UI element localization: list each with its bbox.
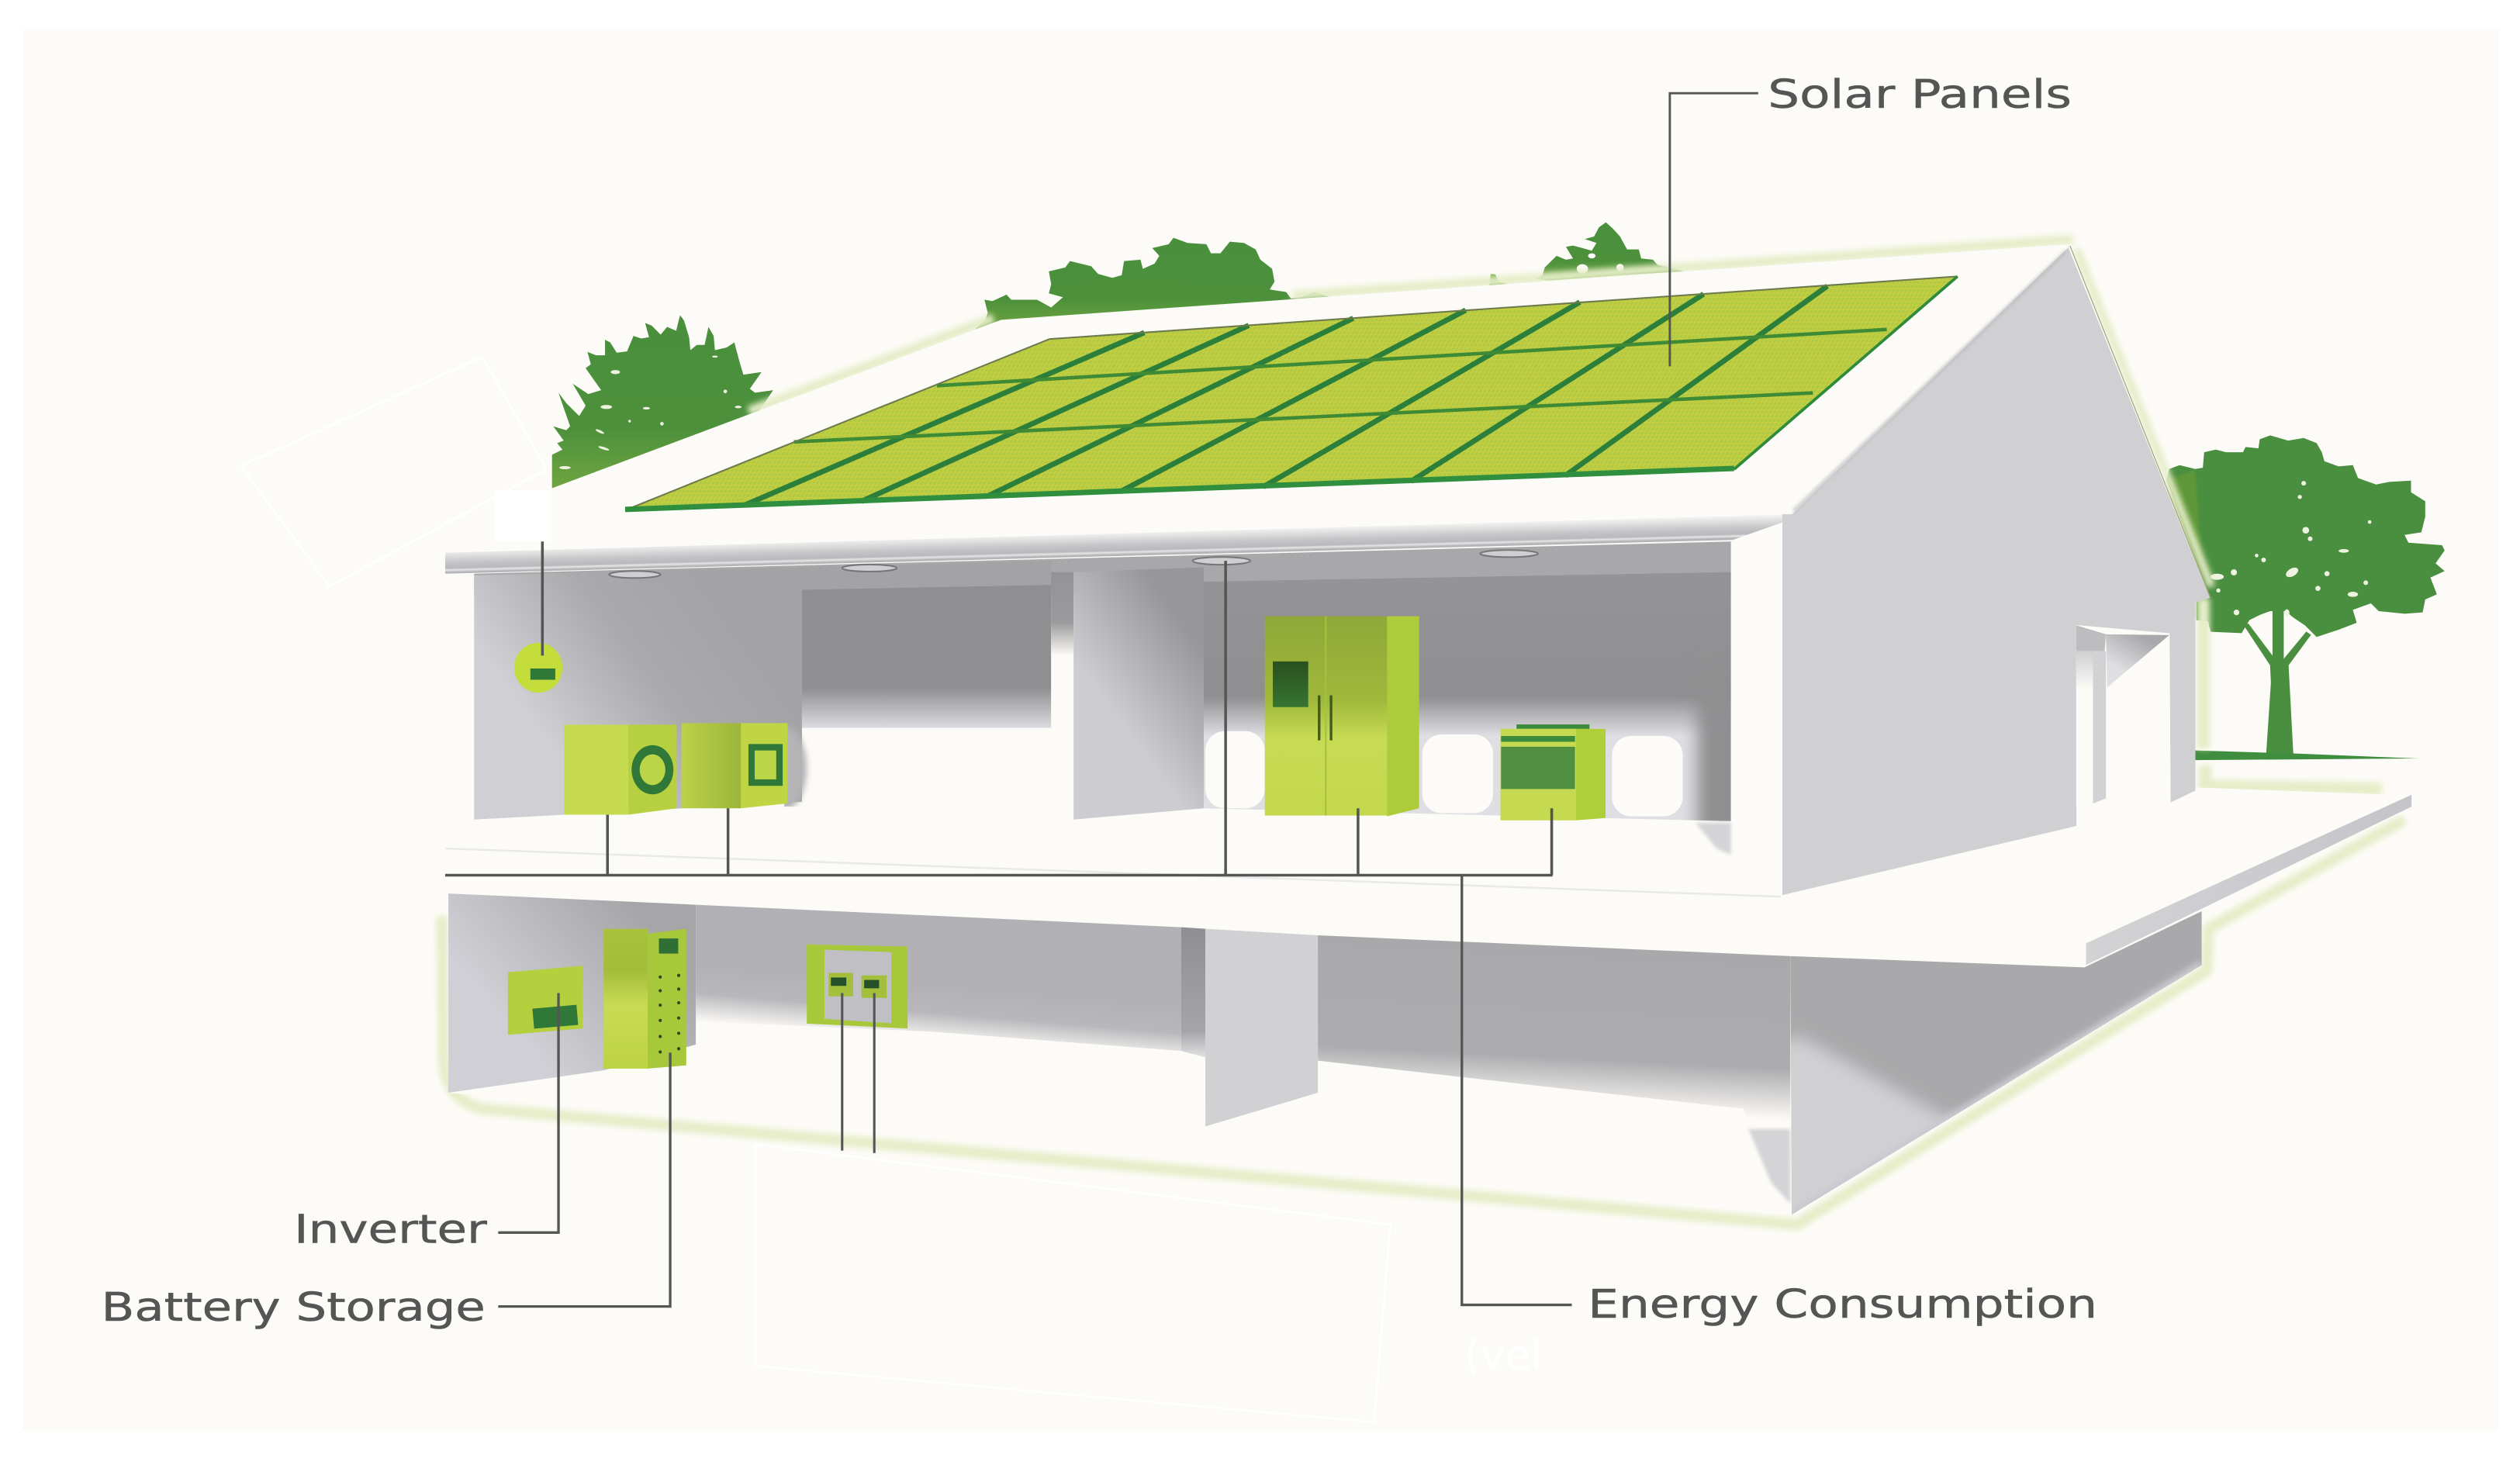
meter wires <box>842 993 874 1153</box>
upper floor interior <box>445 541 1781 897</box>
label: solar panels: Solar Panels <box>1768 71 2072 117</box>
label: inverter: Inverter <box>294 1207 487 1252</box>
gable shaded edge <box>1793 250 2067 511</box>
infographic: solar home cutaway <box>105 78 2445 1329</box>
bush speckles <box>1577 254 1623 274</box>
left room wall <box>474 561 1051 820</box>
leader: battery storage <box>498 1052 670 1307</box>
centre column <box>1073 567 1204 820</box>
white junction box <box>495 490 550 541</box>
inverter unit <box>508 966 582 1035</box>
basement column <box>1205 929 1318 1127</box>
floor edge highlight <box>445 848 1781 897</box>
leader: inverter <box>498 993 558 1232</box>
refrigerator <box>1265 617 1419 817</box>
grey strip beside column <box>1051 572 1073 655</box>
corner floor shadow <box>1696 823 1731 855</box>
oven <box>1500 724 1606 821</box>
oak speckles <box>2211 481 2371 617</box>
leader: solar panels <box>1670 93 1758 366</box>
deck edge <box>2086 795 2411 965</box>
back room two <box>1204 572 1731 821</box>
leader: energy consumption <box>1462 876 1571 1305</box>
back room one <box>802 585 1051 728</box>
doorway opening <box>2076 625 2170 807</box>
label: battery storage: Battery Storage <box>102 1284 486 1330</box>
alcove highlights <box>1205 731 1682 817</box>
pine speckles <box>559 355 741 469</box>
basement back wall one <box>696 905 1181 1051</box>
back room one white floor area <box>802 728 1051 803</box>
thermostat <box>514 643 562 693</box>
ceiling lights <box>609 550 1538 578</box>
solar panels <box>625 276 1958 510</box>
panel surface <box>625 276 1958 510</box>
right shadow strip <box>1688 700 1731 821</box>
right side wall of house <box>1782 247 2210 895</box>
tree: left pine behind roof <box>552 315 773 489</box>
basement right wall <box>1790 911 2202 1214</box>
lit bottom edge <box>1944 960 2201 1120</box>
far right bush <box>1536 223 1683 281</box>
doorway left recess <box>2076 625 2106 651</box>
basement corner wedge <box>1748 1129 1790 1204</box>
basement back wall two <box>1318 935 1790 1128</box>
dryer <box>682 723 787 808</box>
basement column shadow strip <box>1181 928 1205 1057</box>
oak canopy <box>2166 435 2445 637</box>
tree: right oak behind house <box>2166 435 2445 760</box>
house silhouette <box>448 244 2411 1214</box>
basement <box>448 893 2234 1238</box>
shadow beside dryer <box>784 727 810 807</box>
light wedge <box>1791 1033 1948 1213</box>
oak trunk and branches <box>2244 607 2311 755</box>
doorway shaded header <box>2106 634 2169 687</box>
washer <box>564 725 676 815</box>
basement left wall <box>448 893 696 1093</box>
green glow around house <box>442 240 2404 1225</box>
small sprout <box>1489 274 1507 285</box>
doorway pillar <box>2093 651 2106 803</box>
faint watermark text: (vel <box>1464 1330 1543 1379</box>
back doorway <box>2076 625 2170 807</box>
battery storage unit <box>603 929 686 1069</box>
appliance wires <box>542 541 1552 875</box>
tree: bushes behind roof <box>973 223 1683 331</box>
ground strip <box>2195 751 2418 760</box>
panel frame and dividers <box>625 276 1958 510</box>
roof soffit <box>445 514 1792 574</box>
oak left tint <box>2166 470 2209 620</box>
faint ghost outlines <box>241 357 1390 1422</box>
label: energy consumption: Energy Consumption <box>1588 1281 2097 1327</box>
wiring to consumption <box>445 561 1553 875</box>
electrical meters <box>807 945 907 1028</box>
gable right edge <box>2070 246 2210 596</box>
ceiling band <box>474 541 1731 595</box>
